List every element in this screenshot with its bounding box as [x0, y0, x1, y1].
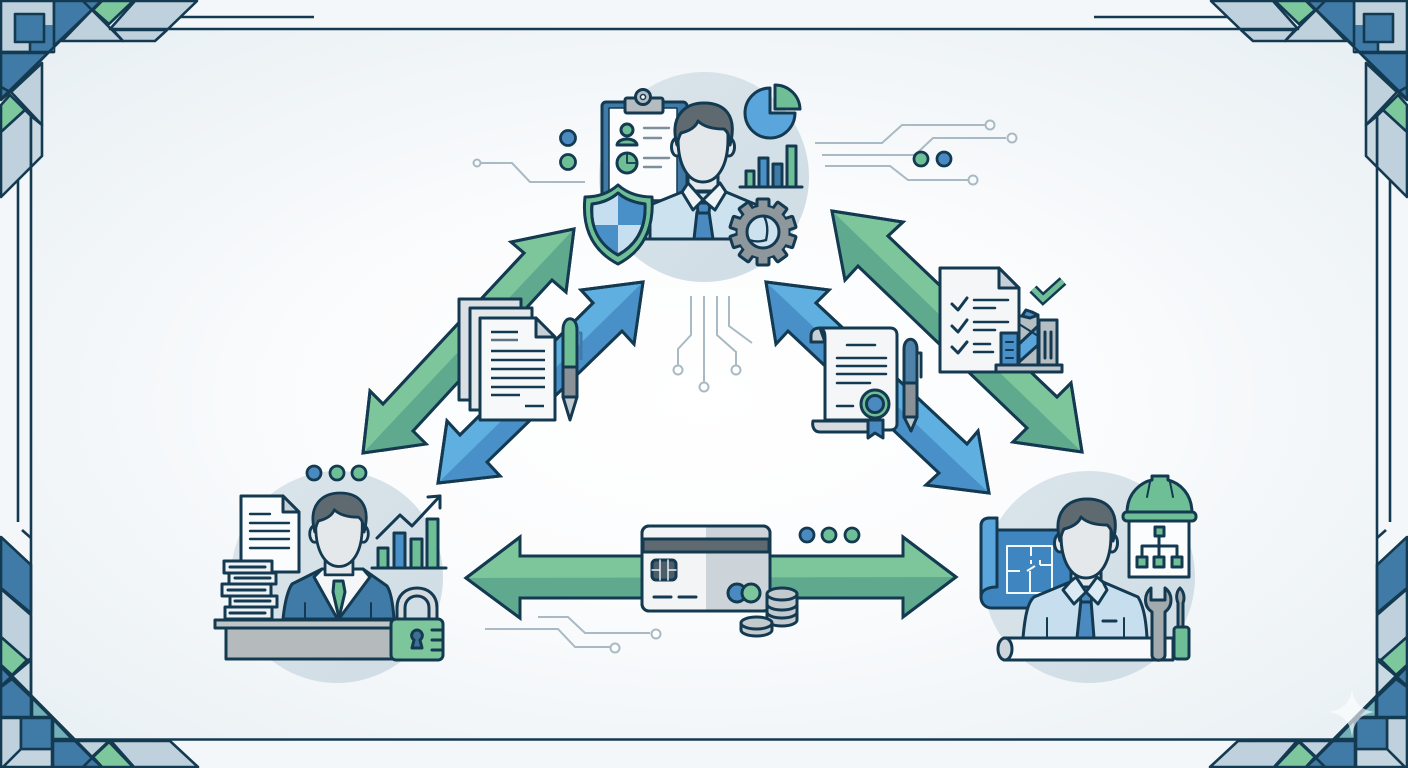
icon: gear [730, 199, 796, 265]
icon: coin stack [767, 588, 797, 626]
icon: checklist with buildings [940, 268, 1063, 372]
circuit traces: top left [474, 160, 585, 182]
arrow: blue top to left [438, 282, 643, 483]
figure: shirt [1023, 582, 1147, 638]
icon: payment card with coins [642, 526, 797, 636]
icon: single coin [741, 617, 772, 636]
figure: head [672, 103, 734, 191]
icon: large check mark [1033, 281, 1063, 299]
icon: wrench [1146, 588, 1171, 660]
icon: document [241, 496, 299, 572]
circuit traces: below card [485, 617, 660, 652]
left person: finance officer [215, 493, 446, 660]
top person: compliance manager [584, 85, 802, 265]
circuit traces: center [674, 296, 752, 392]
figure: torso [650, 192, 770, 239]
icon: rolled plan [998, 638, 1173, 660]
icon: clipboard [602, 90, 687, 200]
circuit traces: top right [815, 120, 1016, 184]
icon: blue pen [904, 339, 921, 431]
icon: org chart board [1129, 520, 1189, 577]
arrow: green top to right [832, 211, 1082, 452]
icon: padlock [391, 588, 443, 660]
figure: suit [283, 569, 394, 619]
icon: shield [584, 185, 652, 264]
icon: certificate with pen [811, 328, 921, 438]
status dots: card [800, 528, 859, 542]
background disc: left person [231, 471, 443, 683]
icon: pie chart [745, 85, 800, 138]
background disc: right person [983, 471, 1195, 683]
icon: hard hat [1123, 476, 1196, 521]
watermark sparkle [1328, 689, 1375, 737]
icon: growth chart [372, 496, 446, 568]
icon: stack of files [222, 561, 277, 619]
figure: head [1054, 499, 1118, 587]
icon: screwdriver [1174, 588, 1189, 659]
background disc: top person [599, 72, 809, 282]
figure: tie and collar [682, 183, 726, 239]
arrow: green top to left [363, 229, 574, 453]
icon: blueprint [981, 518, 1072, 608]
desk [215, 620, 393, 659]
icon: seal ribbon [861, 390, 889, 438]
figure: head [310, 493, 368, 575]
icon: bar chart [740, 146, 802, 187]
figure: shirt and tie [305, 569, 371, 620]
icon: green pen [563, 319, 581, 420]
right person: engineer [981, 476, 1196, 660]
status dots: top left [560, 130, 576, 170]
status dots: top right [914, 152, 951, 166]
arrow: blue top to right [766, 282, 989, 493]
arrow: green left to right [466, 537, 956, 618]
status dots: left person [307, 466, 366, 480]
icon: stacked documents with pen [459, 299, 581, 420]
figure: tie and collar [1063, 577, 1107, 638]
icon: buildings [996, 310, 1062, 372]
